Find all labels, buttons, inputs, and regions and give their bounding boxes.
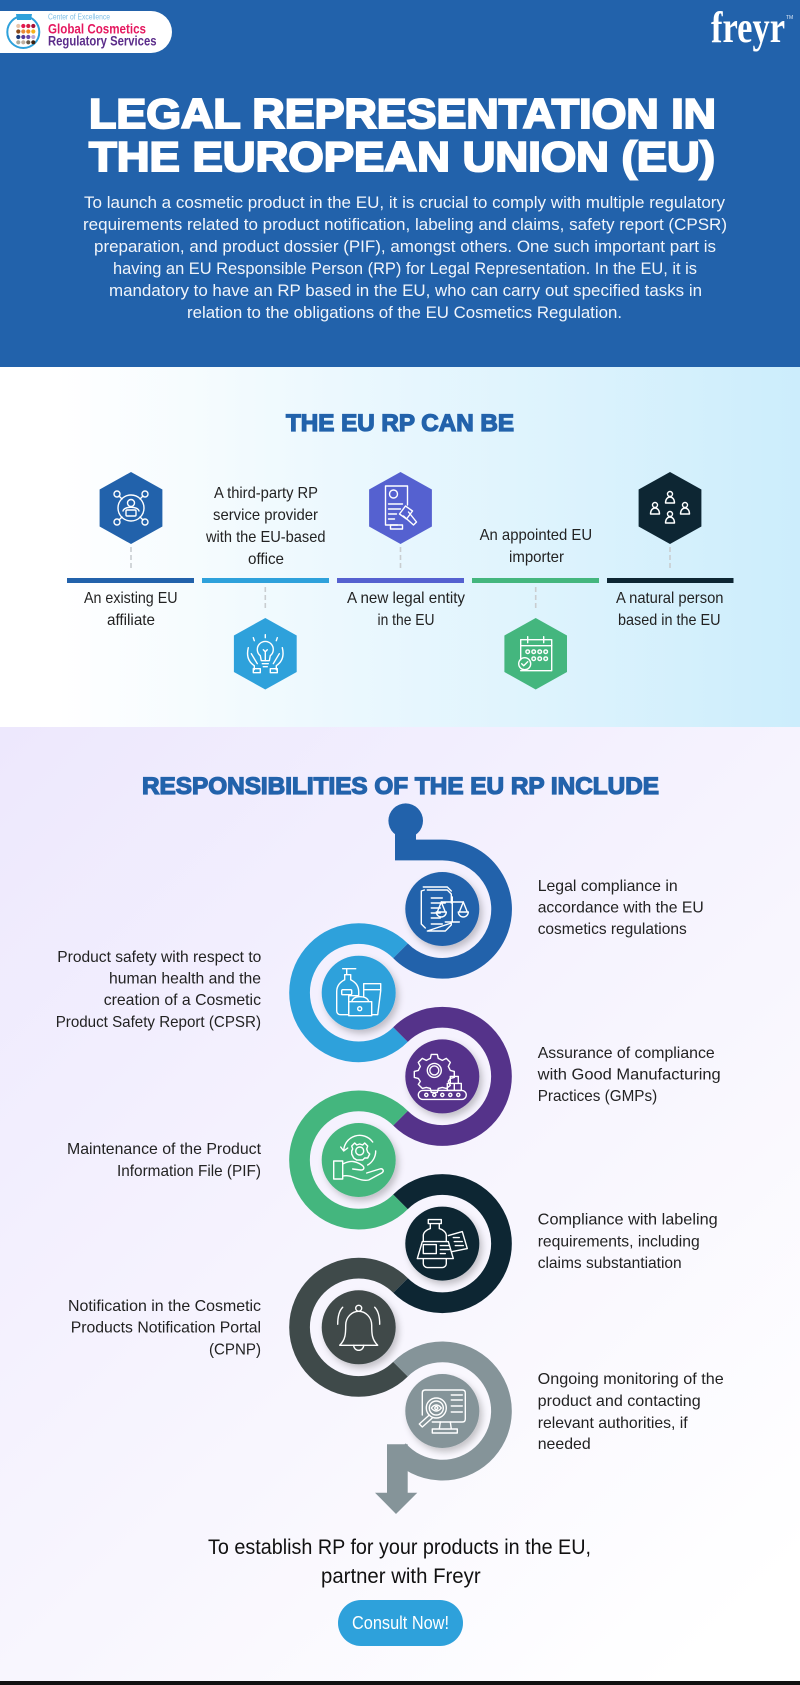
badge: Center of Excellence: Global Cosmetics (48, 22, 146, 36)
step 7: ongoing monitoring: relevant authorities, if (538, 1415, 688, 1432)
step 2: product safety: Product Safety Report (CPSR) (56, 1014, 261, 1031)
column: existing EU affiliate: An existing EU (84, 590, 178, 607)
step 3: GMP assurance (400, 1017, 721, 1136)
column: natural person: based in the EU (618, 612, 720, 629)
column: third-party RP service provider: A third-party RP (214, 485, 318, 502)
step 6: CPNP notification: Notification in the Cosmetic (68, 1298, 261, 1315)
step 7: ongoing monitoring: product and contacting (538, 1393, 701, 1410)
badge: Center of Excellence (0, 11, 172, 53)
step 1: legal compliance: cosmetics regulations (538, 921, 687, 938)
column: third-party RP service provider: office (248, 551, 284, 568)
intro text: requirements related to product notification, labeling and claims, safety report (CPSR) (83, 215, 727, 234)
column: natural person (607, 472, 734, 629)
panel: header (0, 0, 800, 367)
logo: freyr: TM (786, 15, 793, 21)
arrow: down (375, 1444, 417, 1514)
column: third-party RP service provider (202, 485, 329, 690)
intro text: relation to the obligations of the EU Cosmetics Regulation. (187, 303, 622, 322)
intro text: having an EU Responsible Person (RP) for Legal Representation. In the EU, it is (113, 259, 697, 278)
intro text: preparation, and product dossier (PIF), amongst others. One such important part is (94, 237, 716, 256)
step 4: product information file: Maintenance of the Product (67, 1141, 262, 1158)
column: new legal entity: in the EU (378, 612, 434, 629)
badge: Center of Excellence: Center of Excellence (48, 12, 110, 22)
call to action text: To establish RP for your products in the EU, (208, 1536, 591, 1559)
step 6: CPNP notification: Products Notification Portal (71, 1320, 261, 1336)
intro text: mandatory to have an RP based in the EU, who can carry out specified tasks in (109, 281, 702, 300)
column: appointed EU importer: An appointed EU (480, 527, 592, 544)
step 5: labeling compliance: requirements, including (538, 1234, 700, 1250)
step 4: product information file: Information File (PIF) (117, 1163, 261, 1180)
intro text (83, 193, 727, 322)
step 3: GMP assurance: Assurance of compliance (538, 1045, 715, 1062)
column: appointed EU importer (472, 527, 599, 690)
step 7: ongoing monitoring: needed (538, 1436, 591, 1453)
step 2: product safety: human health and the (109, 970, 261, 988)
column: existing EU affiliate (67, 472, 194, 629)
panel: the EU RP can be (0, 367, 800, 727)
heading: responsibilities: RESPONSIBILITIES OF THE EU RP INCLUDE (142, 773, 659, 800)
button: consult now (338, 1600, 463, 1646)
column: new legal entity: A new legal entity (347, 590, 465, 607)
title: THE EUROPEAN UNION (EU) (89, 133, 715, 180)
step 3: GMP assurance: with Good Manufacturing (537, 1066, 721, 1084)
column: appointed EU importer: importer (509, 549, 565, 566)
panel: responsibilities (0, 727, 800, 1681)
column: natural person: A natural person (616, 590, 724, 607)
step 5: labeling compliance: claims substantiation (538, 1255, 682, 1272)
step 2: product safety: Product safety with respect to (57, 949, 261, 966)
column: existing EU affiliate: affiliate (107, 612, 155, 629)
heading: the EU RP can be: THE EU RP CAN BE (286, 410, 514, 437)
step 5: labeling compliance (400, 1184, 718, 1303)
step 6: CPNP notification (68, 1268, 400, 1386)
call to action text: partner with Freyr (321, 1565, 481, 1588)
column: third-party RP service provider: with the EU-based (205, 529, 326, 546)
intro text: To launch a cosmetic product in the EU, it is crucial to comply with multiple regulatory (84, 193, 725, 212)
step 2: product safety (56, 934, 400, 1052)
step 6: CPNP notification: (CPNP) (209, 1342, 261, 1358)
column: third-party RP service provider: service provider (213, 507, 319, 524)
step 7: ongoing monitoring: Ongoing monitoring of the (538, 1371, 724, 1388)
step 4: product information file (67, 1101, 400, 1219)
call to action text (208, 1536, 591, 1588)
column: new legal entity (337, 472, 465, 629)
button: consult now: Consult Now! (352, 1613, 449, 1633)
title (89, 90, 716, 180)
badge: Center of Excellence: Regulatory Services (48, 34, 156, 48)
step 5: labeling compliance: Compliance with labeling (538, 1212, 718, 1228)
step 2: product safety: creation of a Cosmetic (104, 992, 261, 1009)
step 1: legal compliance: Legal compliance in (538, 878, 678, 895)
step 1: legal compliance (388, 803, 704, 968)
title: LEGAL REPRESENTATION IN (89, 90, 716, 137)
step 7: ongoing monitoring (398, 1352, 724, 1470)
step 1: legal compliance: accordance with the EU (538, 900, 704, 916)
step 3: GMP assurance: Practices (GMPs) (538, 1088, 657, 1105)
